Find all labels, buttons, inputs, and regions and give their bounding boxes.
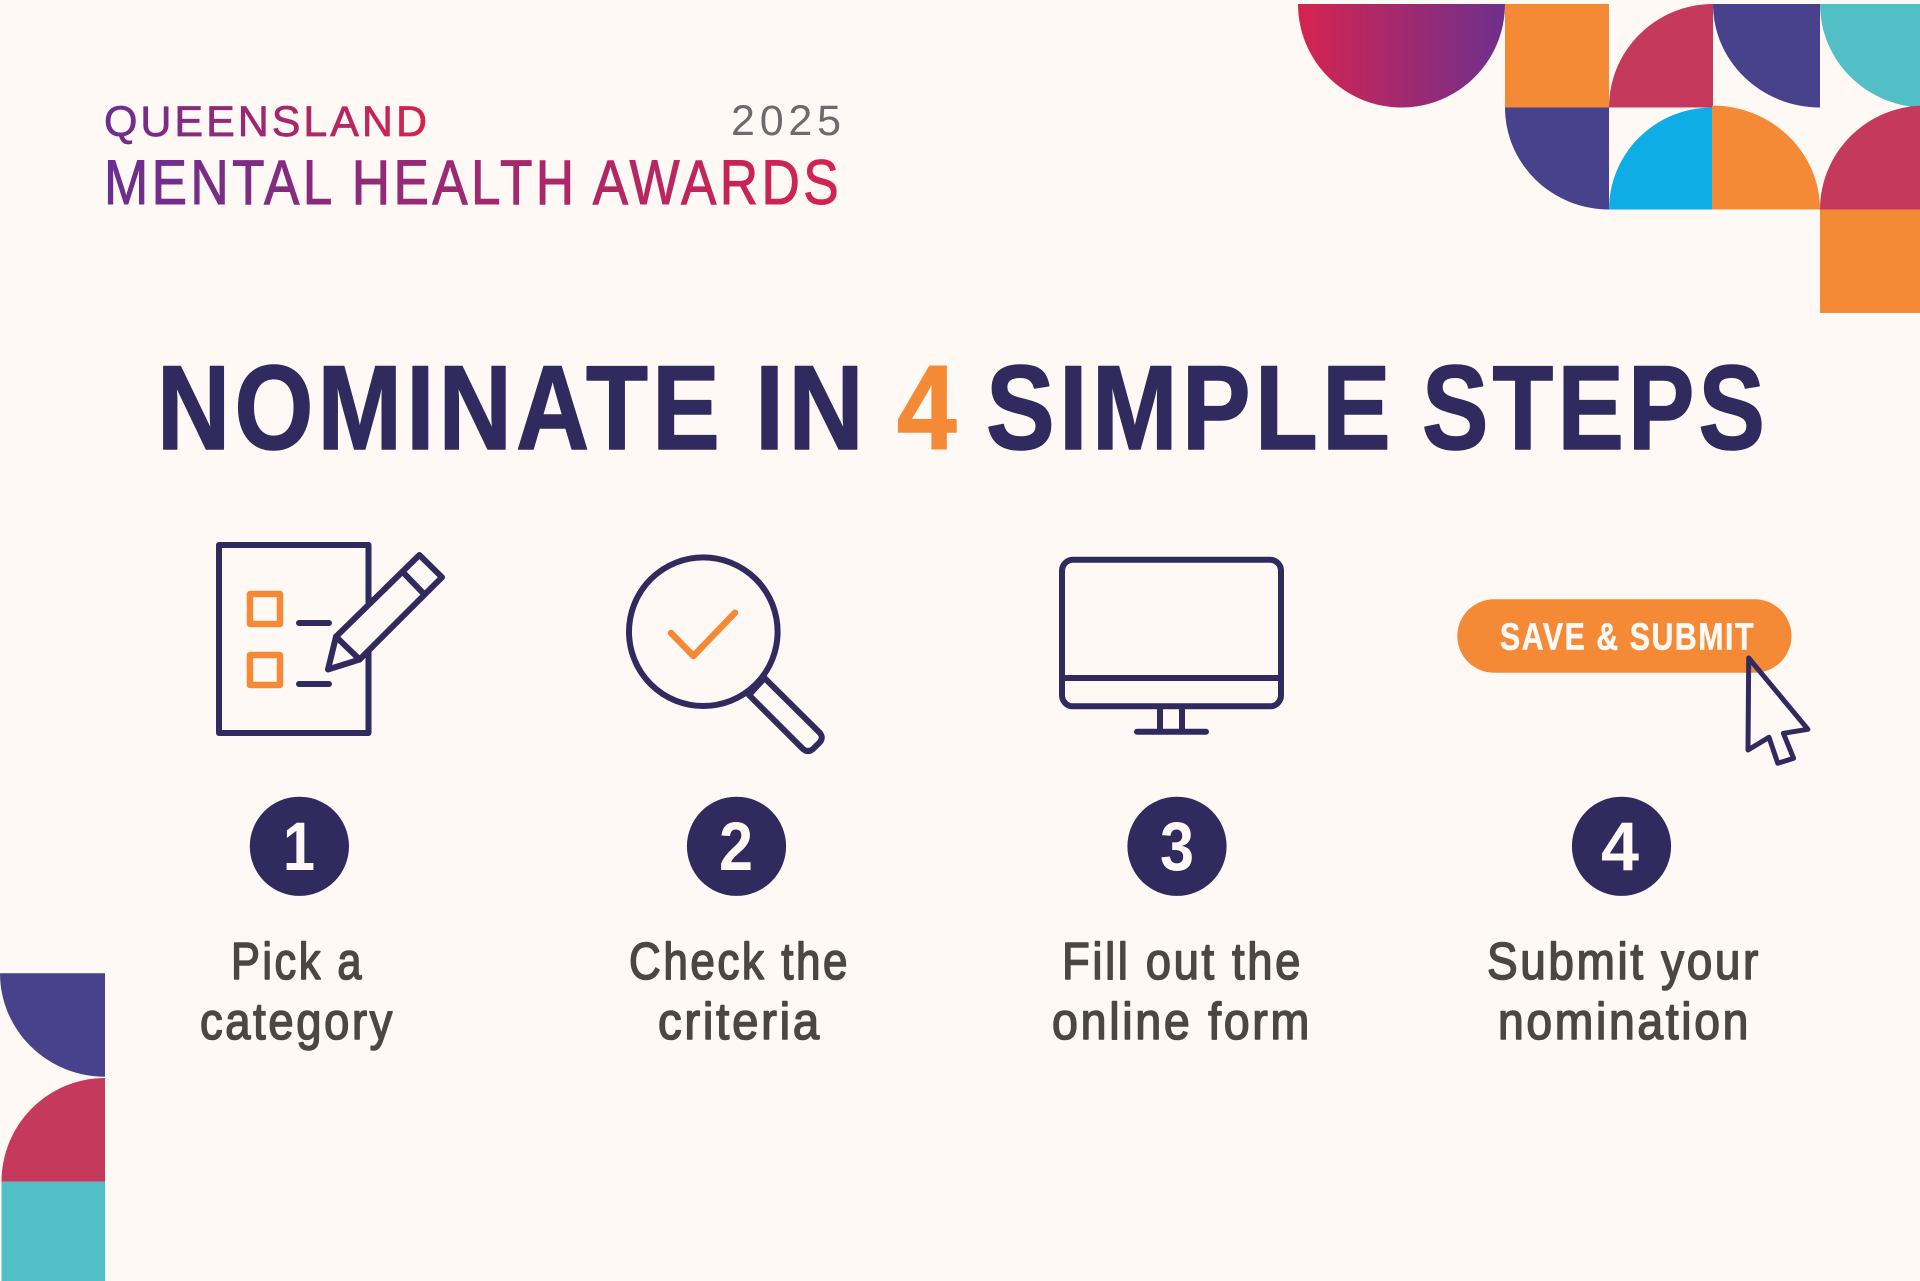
- step 3 label: Fill out the: [1062, 933, 1303, 991]
- step 1 label: category: [200, 993, 395, 1051]
- step 3 number badge: 3: [1160, 808, 1194, 885]
- cursor: [1748, 658, 1808, 763]
- step 4 label: Submit your: [1487, 933, 1761, 991]
- step 1 number badge: 1: [283, 808, 315, 885]
- step 1 label: Pick a: [231, 933, 364, 991]
- decorative geometric pattern: top right: [1298, 4, 1920, 313]
- icon: save and submit button with cursor: [1457, 599, 1808, 763]
- logo: Queensland Mental Health Awards 2025: QUEENSLAND: [104, 98, 427, 146]
- title: SIMPLE: [986, 341, 1395, 475]
- icon: magnifying glass with check: [629, 557, 822, 751]
- step 3 label: online form: [1052, 993, 1312, 1051]
- step 1 number badge: [250, 797, 349, 896]
- icon: checklist with pencil: [219, 545, 442, 733]
- title: 4: [897, 341, 961, 475]
- step 3 label: [1052, 933, 1312, 1051]
- title: STEPS: [1422, 341, 1769, 475]
- button label: SAVE & SUBMIT: [1500, 616, 1755, 658]
- decorative geometric pattern: bottom left: [0, 973, 105, 1281]
- logo: Queensland Mental Health Awards 2025: 2025: [731, 97, 841, 145]
- step 4 number badge: 4: [1601, 808, 1639, 885]
- step 2 number badge: 2: [719, 808, 753, 885]
- icon: desktop monitor: [1062, 560, 1281, 732]
- step 2 label: Check the: [629, 933, 850, 991]
- step 2 label: [629, 933, 850, 1051]
- step 1 label: [200, 933, 395, 1051]
- title: IN: [755, 341, 868, 475]
- logo: Queensland Mental Health Awards 2025: [104, 97, 842, 218]
- title: NOMINATE: [157, 341, 724, 475]
- step 4 label: [1487, 933, 1761, 1051]
- logo: Queensland Mental Health Awards 2025: MENTAL HEALTH AWARDS: [104, 148, 842, 218]
- step 2 number badge: [687, 797, 786, 896]
- step 4 number badge: [1572, 797, 1671, 896]
- step 2 label: criteria: [658, 993, 822, 1051]
- button: [1457, 599, 1792, 673]
- title: [157, 341, 1769, 475]
- step 4 label: nomination: [1498, 993, 1751, 1051]
- step 3 number badge: [1127, 797, 1227, 896]
